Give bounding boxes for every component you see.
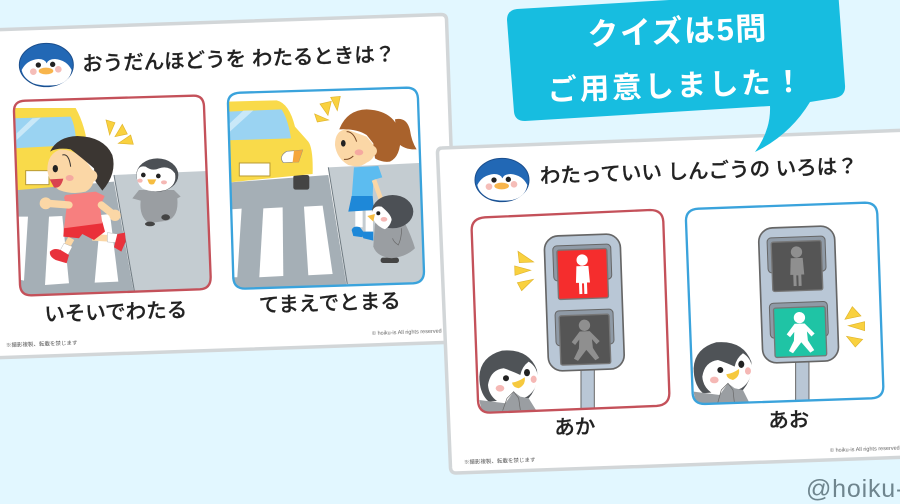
car wheel — [293, 175, 309, 190]
speech bubble — [507, 0, 845, 152]
panel: crosswalk quiz card — [0, 14, 458, 358]
panel: green signal — [686, 203, 883, 408]
label: red: あか — [554, 415, 596, 440]
road — [11, 182, 135, 297]
footnote: ※撮影複製、転載を禁じます — [6, 338, 78, 349]
panel: correct answer, stopping — [227, 88, 430, 290]
label: stopping: てまえでとまる — [259, 290, 401, 317]
sidewalk — [328, 163, 423, 284]
yellow car — [11, 108, 88, 191]
sidewalk — [114, 171, 214, 297]
alert marks — [106, 120, 133, 144]
footnote: ※撮影複製、転載を禁じます — [464, 455, 536, 466]
panel: red signal — [472, 210, 669, 413]
alert marks — [315, 96, 340, 122]
icon: blue penguin face — [475, 158, 529, 202]
bubble text line 2: ご用意しました！ — [547, 65, 806, 108]
panel: wrong answer, rushing across — [11, 96, 214, 297]
gray penguin walking — [132, 158, 181, 226]
label: rushing: いそいでわたる — [44, 299, 188, 326]
pedestrian signal, red lit — [544, 234, 625, 371]
label: blue: あお — [768, 408, 810, 433]
crosswalk stripes — [232, 206, 333, 277]
peeking penguin — [479, 350, 538, 413]
panel: signal quiz card — [438, 130, 900, 473]
icon: blue penguin face — [19, 43, 73, 87]
girl standing — [335, 109, 417, 241]
alert marks — [515, 251, 534, 291]
signal pole — [581, 368, 594, 412]
yellow car — [227, 100, 313, 183]
gray penguin waiting — [367, 195, 415, 263]
pedestrian signal, green lit — [758, 226, 839, 363]
peeking penguin — [694, 342, 752, 408]
copyright: © hoiku-is All rights reserved — [372, 328, 442, 337]
copyright: © hoiku-is All rights reserved — [830, 445, 900, 454]
heading: crosswalk question: おうだんほどうを わたるときは？ — [82, 43, 396, 76]
alert marks — [845, 307, 865, 347]
running child — [40, 136, 126, 263]
crosswalk stripes — [18, 214, 118, 285]
road — [227, 175, 347, 290]
heading: signal question: わたっていい しんごうの いろは？ — [540, 155, 858, 188]
signal pole — [796, 360, 809, 403]
bubble text line 1: クイズは5問 — [587, 11, 768, 52]
